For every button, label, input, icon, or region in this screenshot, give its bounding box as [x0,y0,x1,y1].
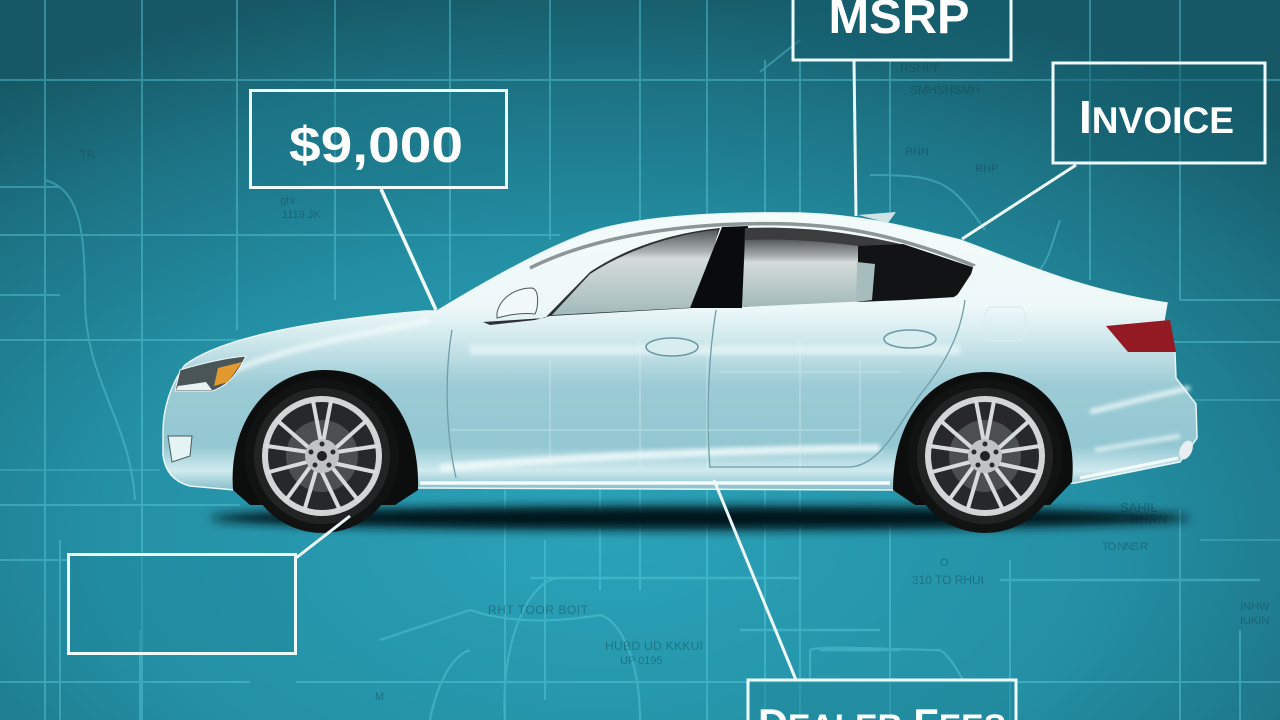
rear wheel arch [893,372,1073,505]
leader line [296,516,350,558]
trim highlights on body [230,320,1190,468]
map street labels: IUKIN [1240,615,1269,627]
map street labels: SMHSHSMH [910,83,980,97]
box [250,90,506,188]
map street labels: INHW [1240,601,1270,613]
leader line [381,189,436,310]
door seams [447,300,1026,478]
map street labels: RHRN [1130,512,1168,527]
map street labels: O [940,557,949,569]
map street labels: TR [80,149,95,161]
label: $9,000 [289,117,463,173]
leader line [962,165,1076,239]
roof antenna [858,212,896,223]
roof highlight and rail [530,224,975,268]
callout: Invoice [962,63,1265,239]
car body [163,213,1197,490]
map street labels: 1119 JK [282,209,321,221]
map street labels: ghi [280,195,295,207]
map street labels: SAHIL [1120,500,1158,515]
headlight lens [176,382,212,390]
rocker and rear sill lines [420,458,1178,483]
label: INVOICE [1079,91,1234,143]
headlight amber [214,362,242,386]
map street labels: RNN [905,146,929,158]
box [793,0,1011,60]
map street labels: M [375,691,384,703]
faint map lines through body [450,340,900,470]
map street labels: 310 TO RHUI [912,573,984,587]
rear reflector [1176,438,1196,462]
ground shadow under car [210,506,1190,530]
map street labels: HUBD UD KKKUI [605,639,703,653]
map street labels: UP 0195 [620,655,663,667]
headlight [175,356,246,391]
map street labels: RHP [975,163,998,175]
front wheel [245,379,399,533]
leader line [714,480,796,680]
box [748,680,1016,720]
box [1053,63,1265,163]
callout: Dealer Fees [714,480,1016,720]
rear wheel [908,379,1062,533]
callout: MSRP [793,0,1011,216]
door handles [646,330,936,356]
callout: empty box [68,516,350,654]
side mirror [497,288,538,318]
map street labels: RSHPF [900,61,941,75]
front wheel arch [233,370,418,505]
callout: $9,000 [250,90,506,310]
leader line [854,60,856,216]
taillight [1106,320,1176,352]
map street labels: RHT TOOR BOIT [488,603,589,617]
map street labels: TO NNS R [1102,541,1148,553]
car [163,212,1197,533]
side windows [483,226,975,325]
fog lamp [168,436,192,462]
box [68,554,296,654]
